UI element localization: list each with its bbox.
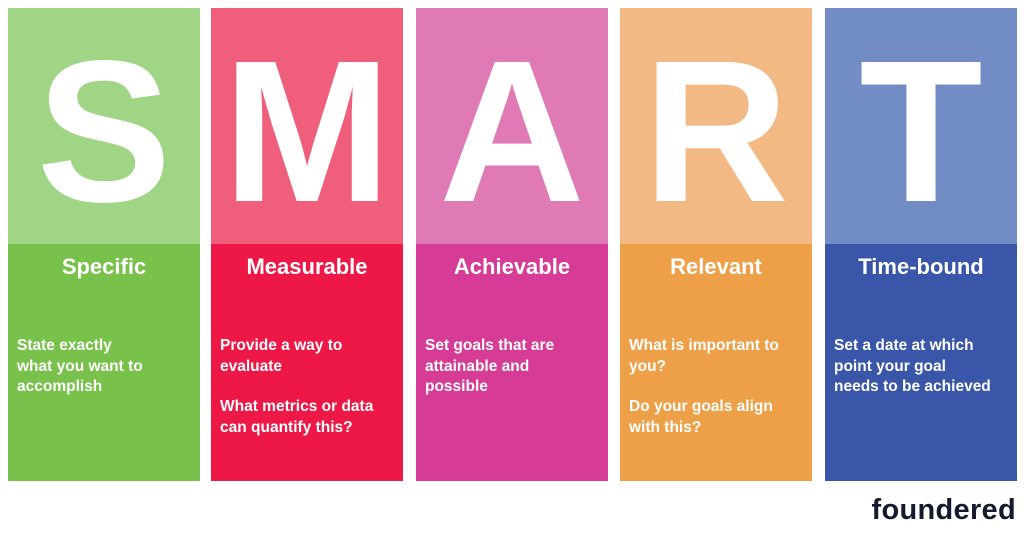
- section: Relevant: [620, 244, 812, 481]
- section: Achievable: Achievable: [454, 254, 570, 279]
- section: Measurable: What metrics or data: [220, 398, 373, 415]
- letter T: [825, 8, 1017, 244]
- section: Achievable: attainable and: [425, 358, 529, 374]
- letter A: A: [439, 18, 585, 244]
- letter M: M: [223, 18, 391, 244]
- logo: foundered: foundered: [872, 494, 1016, 526]
- section: Relevant: with this?: [629, 418, 701, 436]
- section: Measurable: evaluate: [220, 358, 282, 374]
- section: Measurable: can quantify this?: [220, 418, 353, 436]
- section: Time-bound: needs to be achieved: [834, 378, 991, 395]
- letter S: S: [37, 18, 171, 244]
- section: Measurable: Measurable: [246, 254, 368, 279]
- section: Achievable: [416, 244, 608, 481]
- section: Achievable: Set goals that are: [425, 337, 554, 354]
- panel: M Measurable: [211, 8, 403, 481]
- section: Specific: State exactly: [17, 337, 112, 354]
- section: Time-bound: point your goal: [834, 358, 946, 374]
- letter S: [8, 8, 200, 244]
- section: Specific: accomplish: [17, 378, 102, 395]
- section: Relevant: you?: [629, 358, 666, 374]
- section: Time-bound: Time-bound: [858, 254, 984, 279]
- section: Time-bound: [825, 244, 1017, 481]
- panel: S Specific: [8, 8, 200, 481]
- letter R: R: [643, 18, 789, 244]
- section: Relevant: Do your goals align: [629, 398, 773, 415]
- letter T: T: [859, 18, 983, 244]
- section: Measurable: Provide a way to: [220, 337, 342, 354]
- section: Measurable: [211, 244, 403, 481]
- section: Achievable: possible: [425, 378, 488, 395]
- section: Relevant: Relevant: [670, 254, 762, 279]
- section: Specific: [8, 244, 200, 481]
- section: Specific: what you want to: [17, 358, 143, 374]
- section: Time-bound: Set a date at which: [834, 337, 974, 354]
- section: Relevant: What is important to: [629, 337, 779, 354]
- panel: A Achievable: [416, 8, 608, 481]
- section: Specific: Specific: [62, 254, 146, 279]
- panel: R Relevant: [620, 8, 812, 481]
- panel: T Time-bound: [825, 8, 1017, 481]
